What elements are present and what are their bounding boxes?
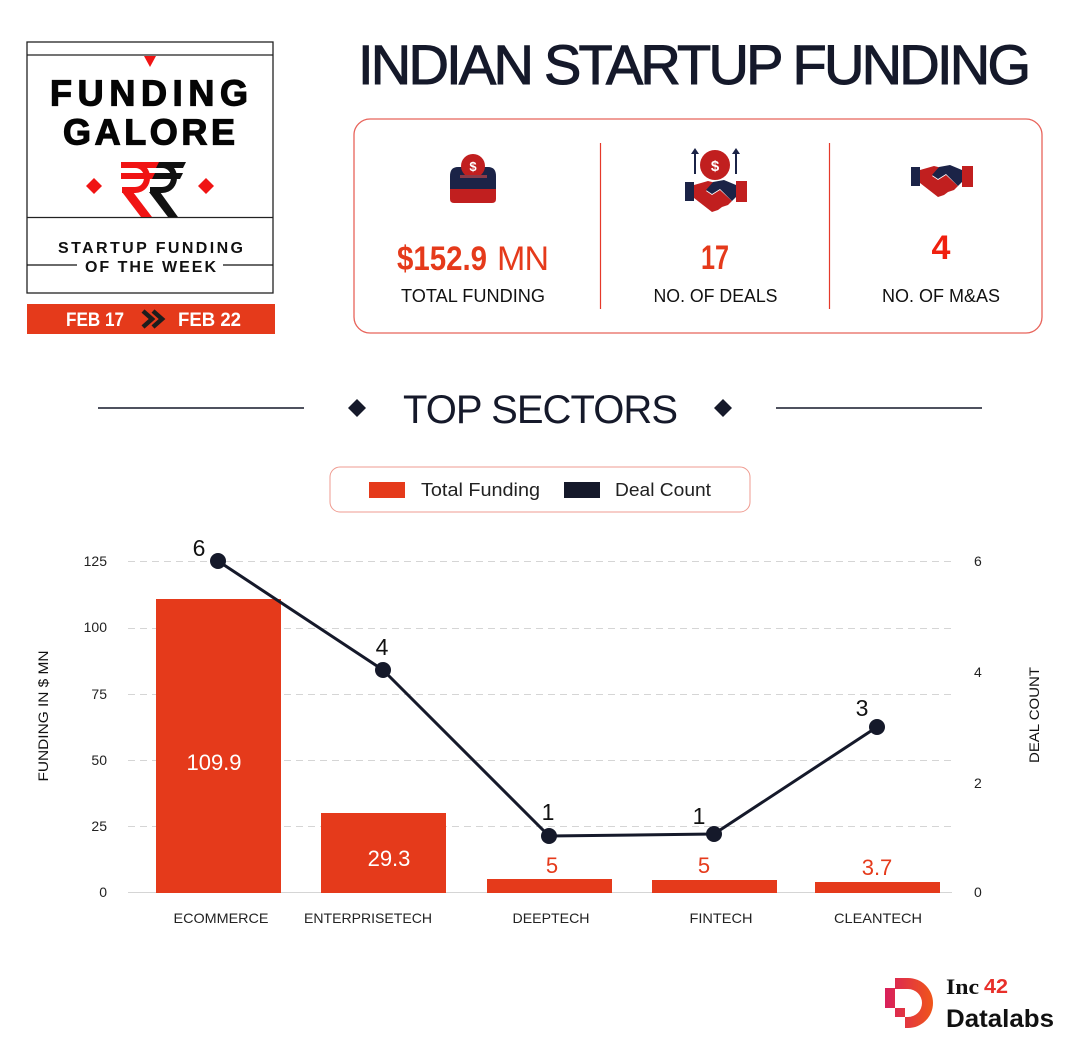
stat: total funding: TOTAL FUNDING [401, 286, 545, 306]
logo: Inc42 Datalabs: 42 [984, 976, 1008, 998]
left axis labels [84, 553, 107, 900]
title: INDIAN STARTUP FUNDING [358, 33, 1031, 96]
stat: number of M&As [882, 229, 1000, 306]
bar values: 109.9 [186, 750, 242, 775]
right axis labels: 2 [974, 775, 982, 791]
bar values: 5 [546, 853, 558, 878]
bar values: 3.7 [862, 855, 892, 880]
bar values: 5 [698, 853, 710, 878]
stat: number of deals: 17 [701, 239, 729, 277]
icon: money box [450, 154, 496, 203]
left axis title: FUNDING IN $ MN [35, 650, 51, 782]
stat: number of deals [654, 239, 778, 306]
stat: number of deals: NO. OF DEALS [654, 286, 778, 306]
deal count labels: 1 [542, 799, 554, 825]
right axis labels: 6 [974, 553, 982, 569]
stat: total funding: $152.9 [397, 240, 487, 278]
left axis labels: 0 [99, 884, 107, 900]
deal count labels: 6 [193, 535, 205, 561]
bar values: 29.3 [368, 846, 410, 871]
icon: deal handshake with coin: $ [711, 158, 720, 175]
left axis labels: 75 [91, 686, 107, 702]
badge: funding galore [27, 42, 273, 293]
legend: Total Funding [421, 479, 540, 500]
bars [156, 599, 940, 893]
category labels: CLEANTECH [834, 910, 922, 926]
stat: number of M&As: NO. OF M&AS [882, 286, 1000, 306]
deal count labels: 3 [856, 695, 868, 721]
category labels: ENTERPRISETECH [304, 910, 432, 926]
icon: deal handshake with coin [685, 148, 747, 212]
heading: top sectors [98, 388, 982, 432]
category labels: DEEPTECH [512, 910, 590, 926]
icon: money box: $ [469, 159, 477, 174]
left axis labels: 50 [91, 752, 107, 768]
right axis title: DEAL COUNT [1026, 667, 1042, 763]
stat: total funding [397, 240, 549, 306]
left axis labels: 25 [91, 818, 107, 834]
badge: funding galore: STARTUP FUNDING [58, 240, 243, 257]
left axis labels: 125 [84, 553, 107, 569]
deal count labels [193, 535, 868, 829]
legend [330, 467, 750, 512]
legend: Deal Count [615, 479, 711, 500]
logo: Inc42 Datalabs [885, 974, 1054, 1033]
icon: red rupee [121, 162, 159, 217]
panel: key stats [354, 119, 1042, 333]
badge: funding galore: FUNDING [50, 72, 248, 114]
right axis labels: 0 [974, 884, 982, 900]
category labels: FINTECH [690, 910, 752, 926]
icon: black rupee [149, 162, 186, 217]
logo: Inc42 Datalabs: Datalabs [946, 1005, 1054, 1033]
deal count labels: 4 [376, 634, 389, 660]
category labels: ECOMMERCE [174, 910, 268, 926]
logo: Inc42 Datalabs: Inc [946, 974, 979, 999]
heading: top sectors: TOP SECTORS [403, 388, 678, 432]
date banner: FEB 17 [66, 310, 124, 331]
right axis labels [974, 553, 982, 900]
date banner [27, 304, 275, 334]
date banner: FEB 22 [178, 310, 241, 331]
stat: total funding: MN [497, 240, 549, 278]
badge: funding galore: GALORE [63, 112, 235, 152]
deal count labels: 1 [693, 803, 705, 829]
stat: number of M&As: 4 [932, 229, 951, 267]
category labels [174, 910, 922, 926]
icon: handshake [911, 165, 973, 197]
right axis labels: 4 [974, 664, 982, 680]
chart: funding and deal count by sector [35, 535, 1042, 926]
badge: funding galore: OF THE WEEK [85, 259, 216, 276]
left axis labels: 100 [84, 619, 107, 635]
bar values [186, 750, 892, 880]
deal count line [210, 553, 885, 844]
